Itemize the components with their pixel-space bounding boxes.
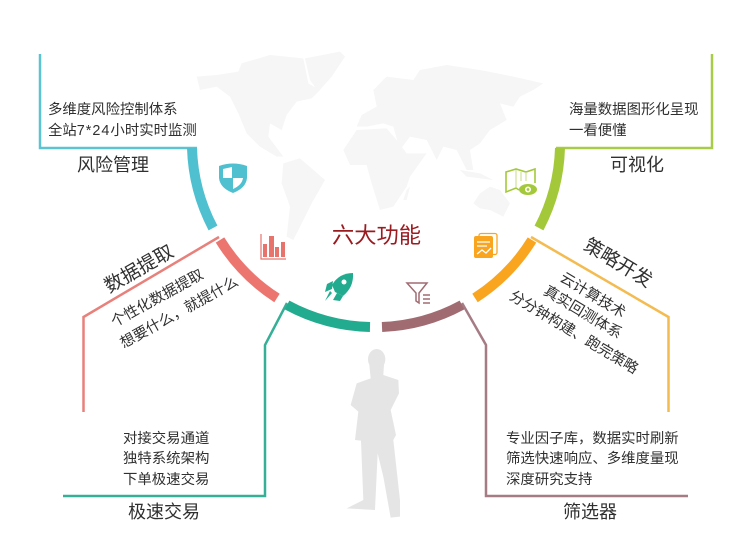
world map background <box>197 52 543 240</box>
text: 数据提取 description: 个性化数据提取 <box>108 266 207 331</box>
text: 可视化 description: 一看便懂 <box>569 122 627 139</box>
icon: bar chart <box>261 234 286 259</box>
panel: 筛选器 <box>382 283 688 522</box>
panel: 风险管理 <box>40 54 247 228</box>
arc: 筛选器 <box>382 305 462 327</box>
arc: 策略开发 <box>475 240 532 298</box>
icon: rocket <box>325 273 353 301</box>
title: 六大功能 <box>332 223 421 248</box>
text: 数据提取 description line 2: 想要什么，就提什么 <box>117 273 241 352</box>
text: 可视化 description: 海量数据图形化呈现 <box>569 101 699 118</box>
connector line: 数据提取 <box>84 237 219 412</box>
icon: shield <box>219 164 247 193</box>
person silhouette <box>347 349 400 518</box>
text: 极速交易 description: 下单极速交易 <box>123 470 209 488</box>
arc: 数据提取 <box>220 240 277 298</box>
heading: 策略开发: 策略开发 <box>580 234 656 292</box>
text: 策略开发 description: 云计算技术 <box>557 269 629 322</box>
text: 策略开发 description line 3: 分分钟构建、跑完策略 <box>506 287 641 378</box>
connector line: 风险管理 <box>40 54 197 148</box>
panel: 极速交易 <box>63 273 370 522</box>
heading: 筛选器: 筛选器 <box>563 502 617 522</box>
text: 筛选器 description: 专业因子库，数据实时刷新 <box>506 430 679 447</box>
text: 风险管理 description: 全站7*24小时实时监测 <box>48 123 197 139</box>
heading: 可视化: 可视化 <box>610 155 664 175</box>
text: 策略开发 description line 2: 真实回测体系 <box>541 282 625 342</box>
heading: 极速交易: 极速交易 <box>128 502 200 522</box>
text: 风险管理 description: 多维度风险控制体系 <box>48 101 178 118</box>
arc: 极速交易 <box>287 305 370 327</box>
text: 筛选器 description: 深度研究支持 <box>506 471 592 488</box>
icon: documents <box>474 234 497 258</box>
icon: map with eye <box>506 169 537 195</box>
arc: 可视化 <box>539 148 560 228</box>
heading: 风险管理: 风险管理 <box>77 155 149 175</box>
panel: 数据提取 <box>84 234 286 412</box>
text: 极速交易 description: 独特系统架构 <box>123 450 209 467</box>
connector line: 筛选器 <box>462 303 688 496</box>
icon: funnel <box>407 283 430 303</box>
connector line: 极速交易 <box>63 303 287 496</box>
panel: 策略开发 <box>474 234 668 412</box>
heading: 数据提取: 数据提取 <box>101 240 177 298</box>
text: 筛选器 description: 筛选快速响应、多维度量现 <box>506 449 679 467</box>
connector line: 策略开发 <box>531 237 668 412</box>
arc: 风险管理 <box>192 148 213 228</box>
text: 极速交易 description: 对接交易通道 <box>123 429 209 447</box>
connector line: 可视化 <box>556 54 712 148</box>
panel: 可视化 <box>506 54 712 228</box>
